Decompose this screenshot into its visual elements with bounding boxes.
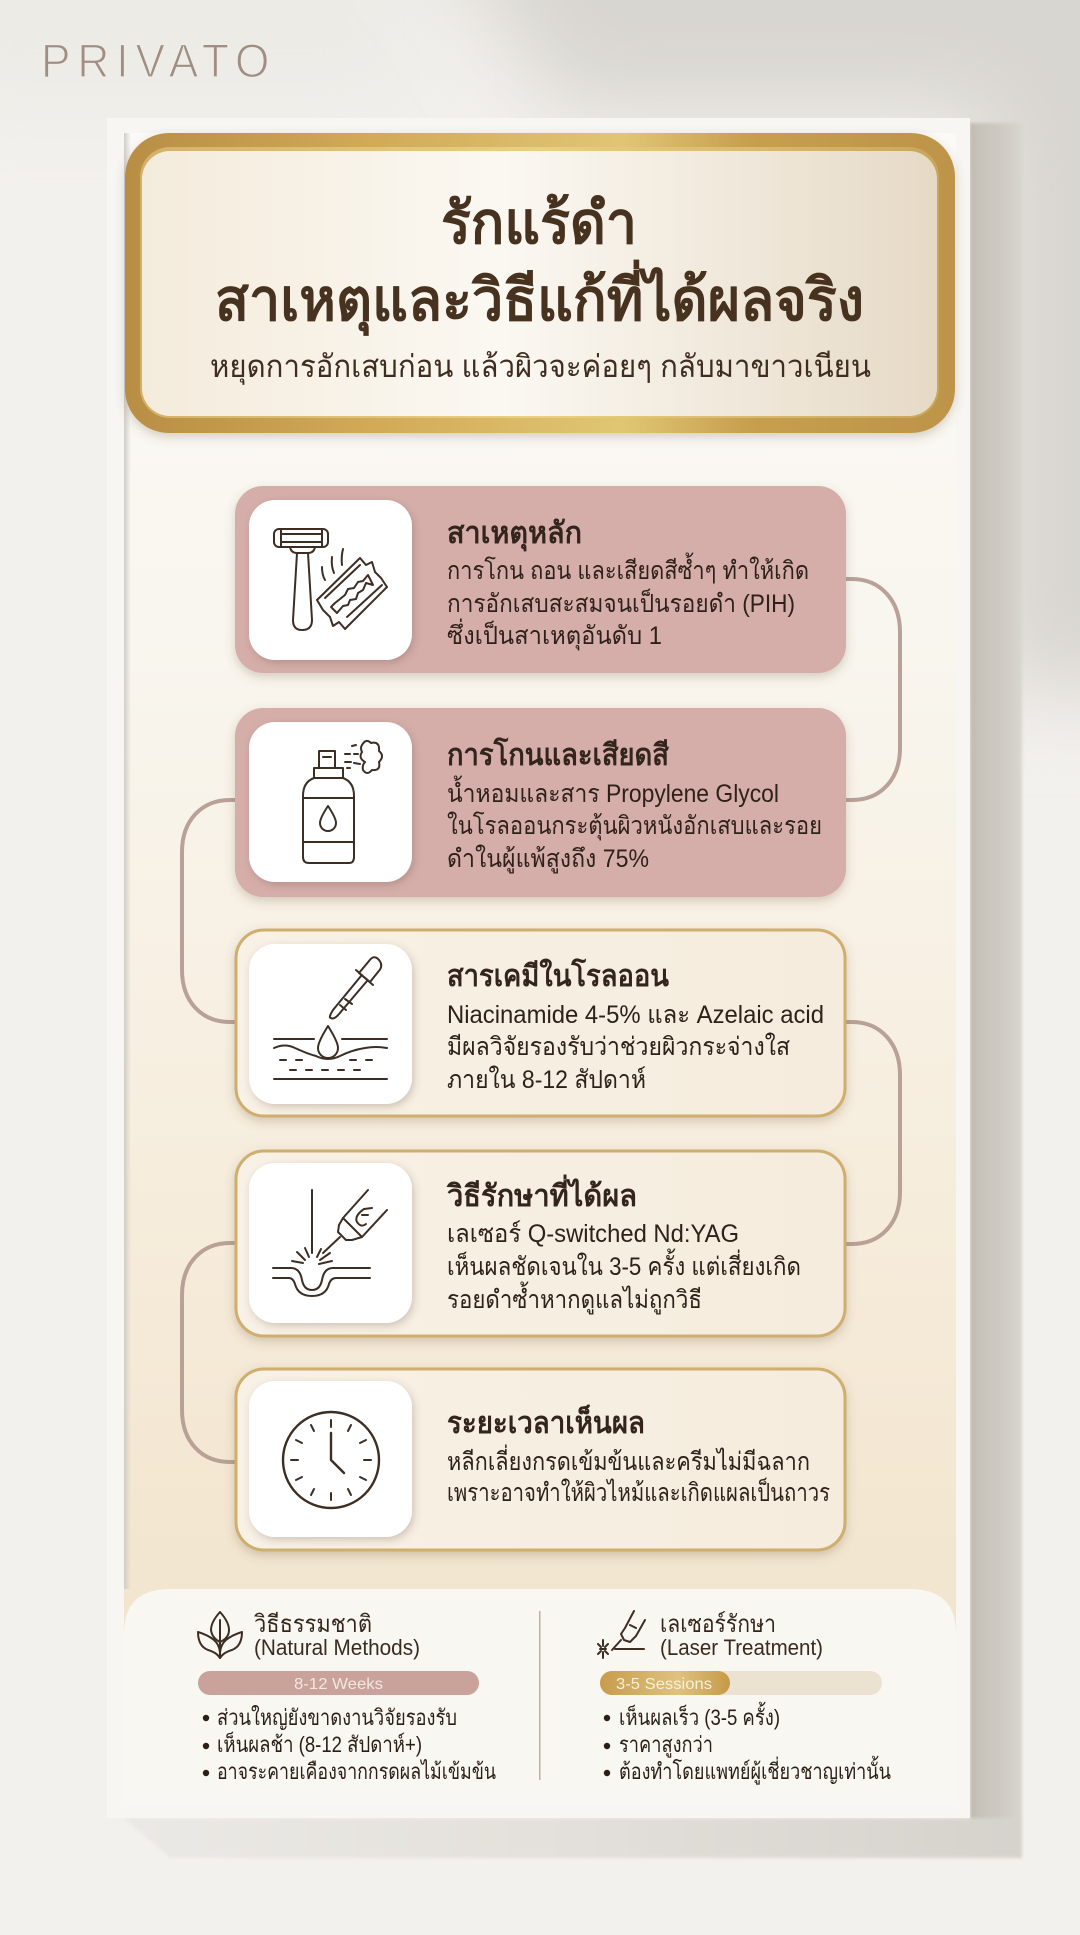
plaque surface <box>142 151 937 416</box>
icon: clock <box>283 1412 379 1508</box>
bullet list: ราคาสูงกว่า <box>619 1732 713 1758</box>
bar: 3-5 sessions <box>600 1671 882 1695</box>
heading: วิธีรักษาที่ได้ผล <box>446 1174 637 1213</box>
frame shadow <box>124 123 1022 1858</box>
bar: 8-12 weeks: 8-12 Weeks <box>294 1676 383 1693</box>
icon tile 2 <box>249 722 412 882</box>
panel: card 1 main cause <box>235 486 846 673</box>
bullet list: ส่วนใหญ่ยังขาดงานวิจัยรองรับ <box>217 1705 457 1730</box>
body line 3: ภายใน 8-12 สัปดาห์ <box>447 1065 646 1094</box>
white poster frame <box>107 118 970 1818</box>
subheading: (Laser Treatment) <box>660 1635 823 1660</box>
connector lines <box>182 579 900 1462</box>
column: natural methods <box>198 1611 496 1784</box>
icon: dropper over skin <box>274 957 387 1079</box>
bullet list: เห็นผลเร็ว (3-5 ครั้ง) <box>619 1702 780 1730</box>
title line 1: รักแร้ดำ <box>441 191 637 256</box>
title plaque <box>125 133 955 433</box>
body line 1: การโกน ถอน และเสียดสีซ้ำๆ ทำให้เกิด <box>447 552 809 585</box>
title line 2: สาเหตุและวิธีแก้ที่ได้ผลจริง <box>215 259 864 337</box>
heading: วิธีธรรมชาติ <box>254 1611 372 1638</box>
bullet list: อาจระคายเคืองจากกรดผลไม้เข้มข้น <box>217 1759 496 1784</box>
panel: card 2 shaving and friction <box>235 708 846 897</box>
body line 1: น้ำหอมและสาร Propylene Glycol <box>447 775 779 808</box>
panel: card 3 roll-on chemicals <box>236 930 845 1116</box>
bullet list: เห็นผลช้า (8-12 สัปดาห์+) <box>217 1730 422 1757</box>
icon: razor and blade <box>274 529 387 630</box>
body line 2: ในโรลออนกระตุ้นผิวหนังอักเสบและรอย <box>447 811 822 841</box>
icon: laser pen <box>598 1611 645 1658</box>
body line 3: ซึ่งเป็นสาเหตุอันดับ 1 <box>447 618 662 651</box>
body line 3: ดำในผู้แพ้สูงถึง 75% <box>447 844 649 874</box>
panel: comparison <box>124 1589 956 1803</box>
body line 2: การอักเสบสะสมจนเป็นรอยดำ (PIH) <box>447 588 795 618</box>
column: laser treatment <box>598 1610 891 1785</box>
heading: สาเหตุหลัก <box>447 517 582 552</box>
body line 1: เลเซอร์ Q-switched Nd:YAG <box>447 1220 739 1248</box>
heading: เลเซอร์รักษา <box>660 1610 776 1638</box>
icon: leaves <box>198 1612 242 1658</box>
logo: PRIVATO: PRIVATO <box>41 35 269 87</box>
icon tile 1 <box>249 500 412 660</box>
icon: spray bottle <box>303 741 382 863</box>
bullet list <box>203 1705 496 1784</box>
body line 1: หลีกเลี่ยงกรดเข้มข้นและครีมไม่มีฉลาก <box>447 1444 810 1476</box>
icon tile 5 <box>249 1381 412 1537</box>
icon tile 4 <box>249 1163 412 1323</box>
icon tile 3 <box>249 944 412 1104</box>
subtitle: หยุดการอักเสบก่อน แล้วผิวจะค่อยๆ กลับมาขาวเนียน <box>210 349 871 386</box>
bullet list <box>604 1702 891 1785</box>
body line 2: มีผลวิจัยรองรับว่าช่วยผิวกระจ่างใส <box>447 1032 790 1061</box>
body line 2: เพราะอาจทำให้ผิวไหม้และเกิดแผลเป็นถาวร <box>447 1477 830 1507</box>
bullet list: ต้องทำโดยแพทย์ผู้เชี่ยวชาญเท่านั้น <box>619 1756 891 1785</box>
panel: card 5 time to results <box>236 1369 845 1550</box>
heading: การโกนและเสียดสี <box>447 736 670 772</box>
body line 2: เห็นผลชัดเจนใน 3-5 ครั้ง แต่เสี่ยงเกิด <box>447 1248 801 1281</box>
body line 1: Niacinamide 4-5% และ Azelaic acid <box>447 1001 824 1029</box>
bar: 3-5 sessions: 3-5 Sessions <box>616 1676 712 1693</box>
subheading: (Natural Methods) <box>254 1635 420 1660</box>
body line 3: รอยดำซ้ำหากดูแลไม่ถูกวิธี <box>447 1281 702 1315</box>
bar: 8-12 weeks <box>198 1671 479 1695</box>
icon: laser on skin <box>273 1190 387 1296</box>
gold border <box>125 133 955 433</box>
panel: card 4 effective treatment <box>236 1151 845 1336</box>
heading: ระยะเวลาเห็นผล <box>447 1404 645 1440</box>
heading: สารเคมีในโรลออน <box>447 957 669 993</box>
